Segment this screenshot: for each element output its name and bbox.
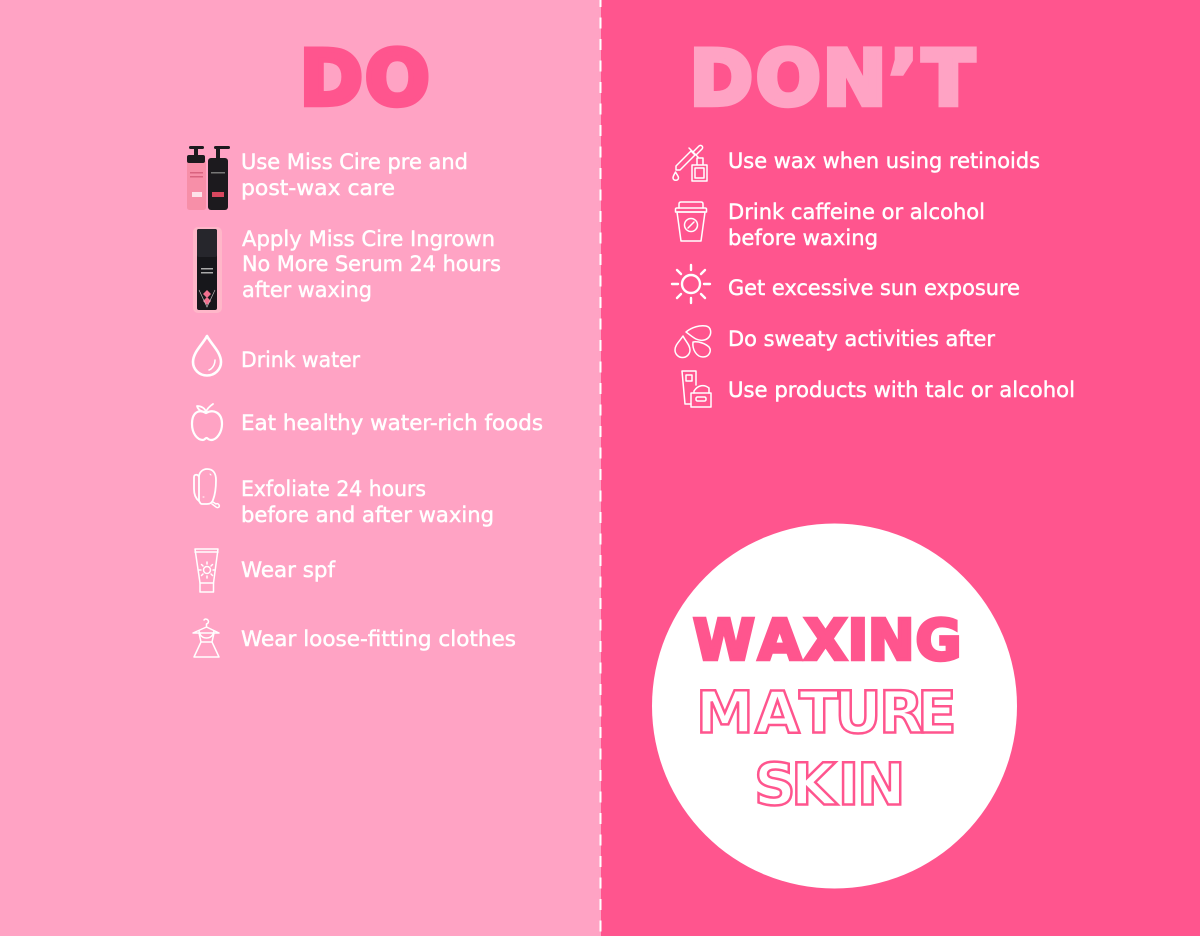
list item: talc or alcohol: Use products with talc or alcohol: [728, 378, 1075, 402]
list item: exfoliate: Exfoliate 24 hours: [241, 477, 426, 501]
heading: DO: DO: [300, 33, 430, 122]
icon: exfoliating glove: [194, 469, 219, 508]
callout title: waxing: WAXING: [693, 608, 961, 673]
list item: bottles text: Use Miss Cire pre and: [241, 150, 468, 174]
heading: DON'T: DON’T: [690, 33, 974, 122]
list item: serum text: [242, 227, 501, 302]
list item: eat healthy: Eat healthy water-rich foods: [241, 411, 543, 435]
icon: tube and cream jar: [682, 371, 711, 407]
list item: loose-fitting clothes: Wear loose-fitting clothes: [241, 627, 516, 651]
list item: caffeine: [728, 200, 985, 250]
icon: dress on hanger: [193, 619, 219, 657]
icon: apple: [192, 404, 222, 440]
icon: takeaway coffee cup: [676, 202, 706, 241]
list item: bottles text: [241, 150, 468, 200]
icon: water drop: [193, 336, 221, 376]
callout title: skin: SKIN: [754, 750, 906, 818]
icon: pre and post-wax bottles: [187, 146, 230, 210]
icon: retinoid dropper and bottle: [673, 145, 707, 181]
list item: sweaty activities: Do sweaty activities after: [728, 327, 995, 351]
list item: exfoliate: before and after waxing: [241, 503, 494, 527]
list item: drink water: Drink water: [241, 348, 360, 372]
list item: serum text: No More Serum 24 hours: [242, 252, 501, 276]
list item: serum text: after waxing: [242, 278, 372, 302]
list item: bottles text: post-wax care: [241, 176, 395, 200]
list item: retinoids: Use wax when using retinoids: [728, 149, 1040, 173]
list item: caffeine: Drink caffeine or alcohol: [728, 200, 985, 224]
icon: sun: [672, 265, 710, 303]
panel: do background: [0, 0, 601, 936]
panel: don't background: [601, 0, 1200, 936]
callout: waxing mature skin circle: [652, 524, 1017, 888]
icon: ingrown serum bottle: [193, 227, 222, 313]
list item: wear spf: Wear spf: [241, 558, 336, 582]
icon: sunscreen tube: [195, 549, 218, 592]
list item: exfoliate: [241, 477, 494, 527]
icon: sweat drops: [675, 326, 711, 358]
list item: sun exposure: Get excessive sun exposure: [728, 276, 1020, 300]
callout title: mature: MATURE: [696, 678, 957, 746]
list item: caffeine: before waxing: [728, 226, 878, 250]
list item: serum text: Apply Miss Cire Ingrown: [242, 227, 495, 251]
